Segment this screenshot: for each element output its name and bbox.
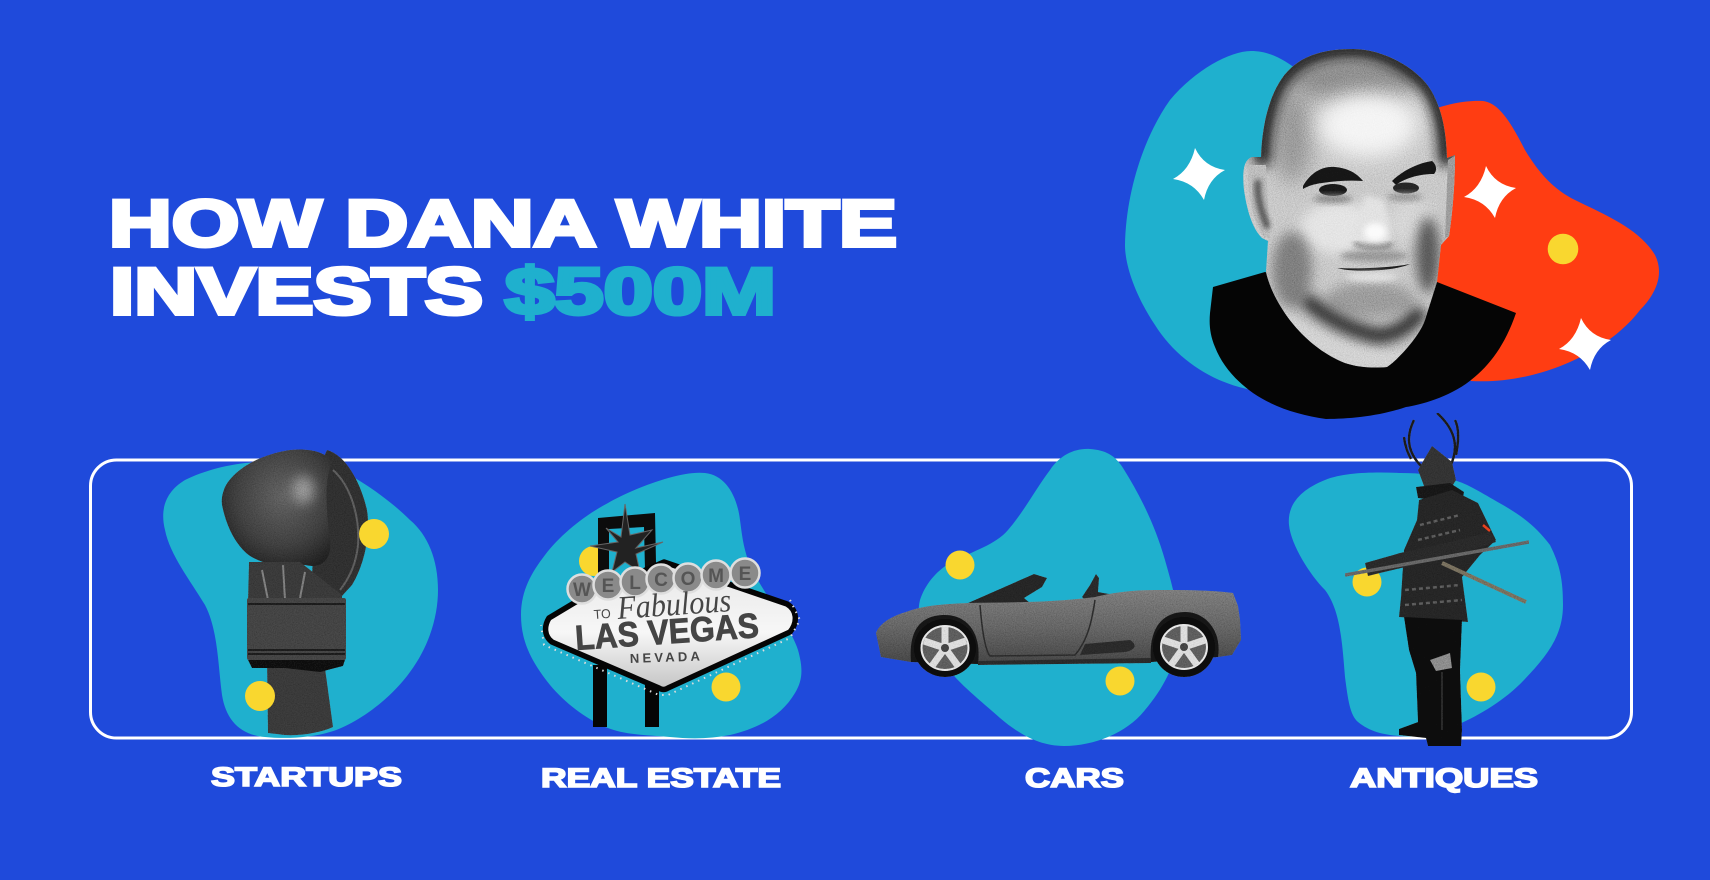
star frame (598, 513, 656, 590)
helmet (1418, 446, 1456, 490)
legs (1399, 617, 1462, 746)
sill shadow (978, 640, 1151, 665)
welcome discs (568, 558, 760, 604)
yellow dot lower (1106, 666, 1134, 696)
category: cars (876, 449, 1241, 793)
sign text (574, 583, 760, 666)
convertible car (876, 574, 1241, 677)
forearm (267, 660, 333, 735)
wheel arches (911, 612, 1219, 664)
panel outline (90, 460, 1632, 738)
yellow dot upper (579, 546, 609, 576)
windshield (968, 574, 1047, 606)
category: real estate (521, 473, 801, 793)
neck (1284, 312, 1405, 368)
mask (1416, 483, 1464, 503)
sign text: NEVADA (630, 649, 701, 666)
glove fist (222, 450, 332, 566)
label: cars: CARS (1025, 763, 1124, 793)
teal blob: real estate (521, 473, 801, 738)
star (590, 504, 663, 572)
yellow dot on red blob (1548, 234, 1578, 264)
glove fingers (248, 562, 342, 602)
welcome letters: E (739, 564, 751, 585)
yellow dot upper (359, 519, 389, 549)
label: startups: STARTUPS (211, 762, 402, 792)
welcome letters: C (654, 570, 668, 591)
brows (1303, 167, 1363, 189)
front wheel (914, 619, 976, 677)
title: $500M (505, 254, 776, 328)
welcome letters: E (602, 576, 614, 597)
glove cuff (247, 598, 346, 660)
yellow dot upper (946, 550, 974, 580)
label: antiques: ANTIQUES (1350, 763, 1538, 793)
samurai armor figure (1345, 413, 1529, 746)
door lines (980, 600, 1095, 656)
title (109, 186, 897, 328)
title: HOW DANA WHITE (109, 186, 897, 260)
nose (1362, 194, 1392, 246)
glove cuff bottom (248, 660, 345, 672)
rear wheel (1153, 617, 1215, 677)
sword (1442, 563, 1526, 602)
teal blob: startups (163, 462, 438, 738)
welcome letters (573, 564, 751, 601)
teal blob: antiques (1289, 473, 1563, 736)
sparkle lower right (1559, 318, 1611, 370)
antlers (1404, 413, 1458, 467)
welcome letters: O (681, 569, 695, 590)
title: INVESTS (110, 254, 483, 328)
car body (876, 590, 1241, 664)
sign text: LAS VEGAS (574, 606, 760, 658)
sign bulbs (541, 600, 800, 695)
sign legs (593, 665, 659, 727)
torso armor (1399, 490, 1496, 622)
teal blob behind portrait (1125, 51, 1340, 392)
sign text: TO (593, 606, 611, 622)
Las Vegas sign (541, 504, 800, 727)
welcome letters: M (708, 566, 724, 587)
eyes (1319, 184, 1347, 196)
head photo approximation (1240, 45, 1460, 375)
category: startups (163, 450, 438, 792)
sign diamond (546, 562, 795, 690)
black shirt (1210, 272, 1516, 419)
staff (1345, 542, 1529, 575)
arm (1365, 532, 1496, 576)
armor red accents (1422, 525, 1490, 638)
label: real estate: REAL ESTATE (541, 763, 781, 793)
glove highlight (292, 476, 314, 504)
moustache (1340, 250, 1408, 262)
teal blob: cars (919, 449, 1178, 746)
jaw shadow (1305, 298, 1422, 336)
leg plates (1430, 653, 1452, 671)
yellow dot lower (245, 681, 275, 711)
rear headrest (1082, 574, 1120, 604)
sign text: Fabulous (615, 583, 732, 627)
yellow dot lower (712, 672, 740, 702)
welcome letters: L (629, 573, 641, 594)
yellow dot lower (1466, 672, 1496, 702)
sparkle right (1464, 166, 1516, 218)
portrait: Dana White with blobs (1125, 45, 1659, 419)
category: antiques (1289, 413, 1563, 793)
sparkle left (1173, 148, 1225, 200)
boxing glove on arm (222, 450, 368, 735)
glove thumb side (312, 450, 368, 596)
mouth (1337, 264, 1410, 271)
yellow dot upper (1352, 568, 1382, 596)
red blob behind portrait (1400, 101, 1659, 381)
welcome letters: W (573, 580, 591, 601)
